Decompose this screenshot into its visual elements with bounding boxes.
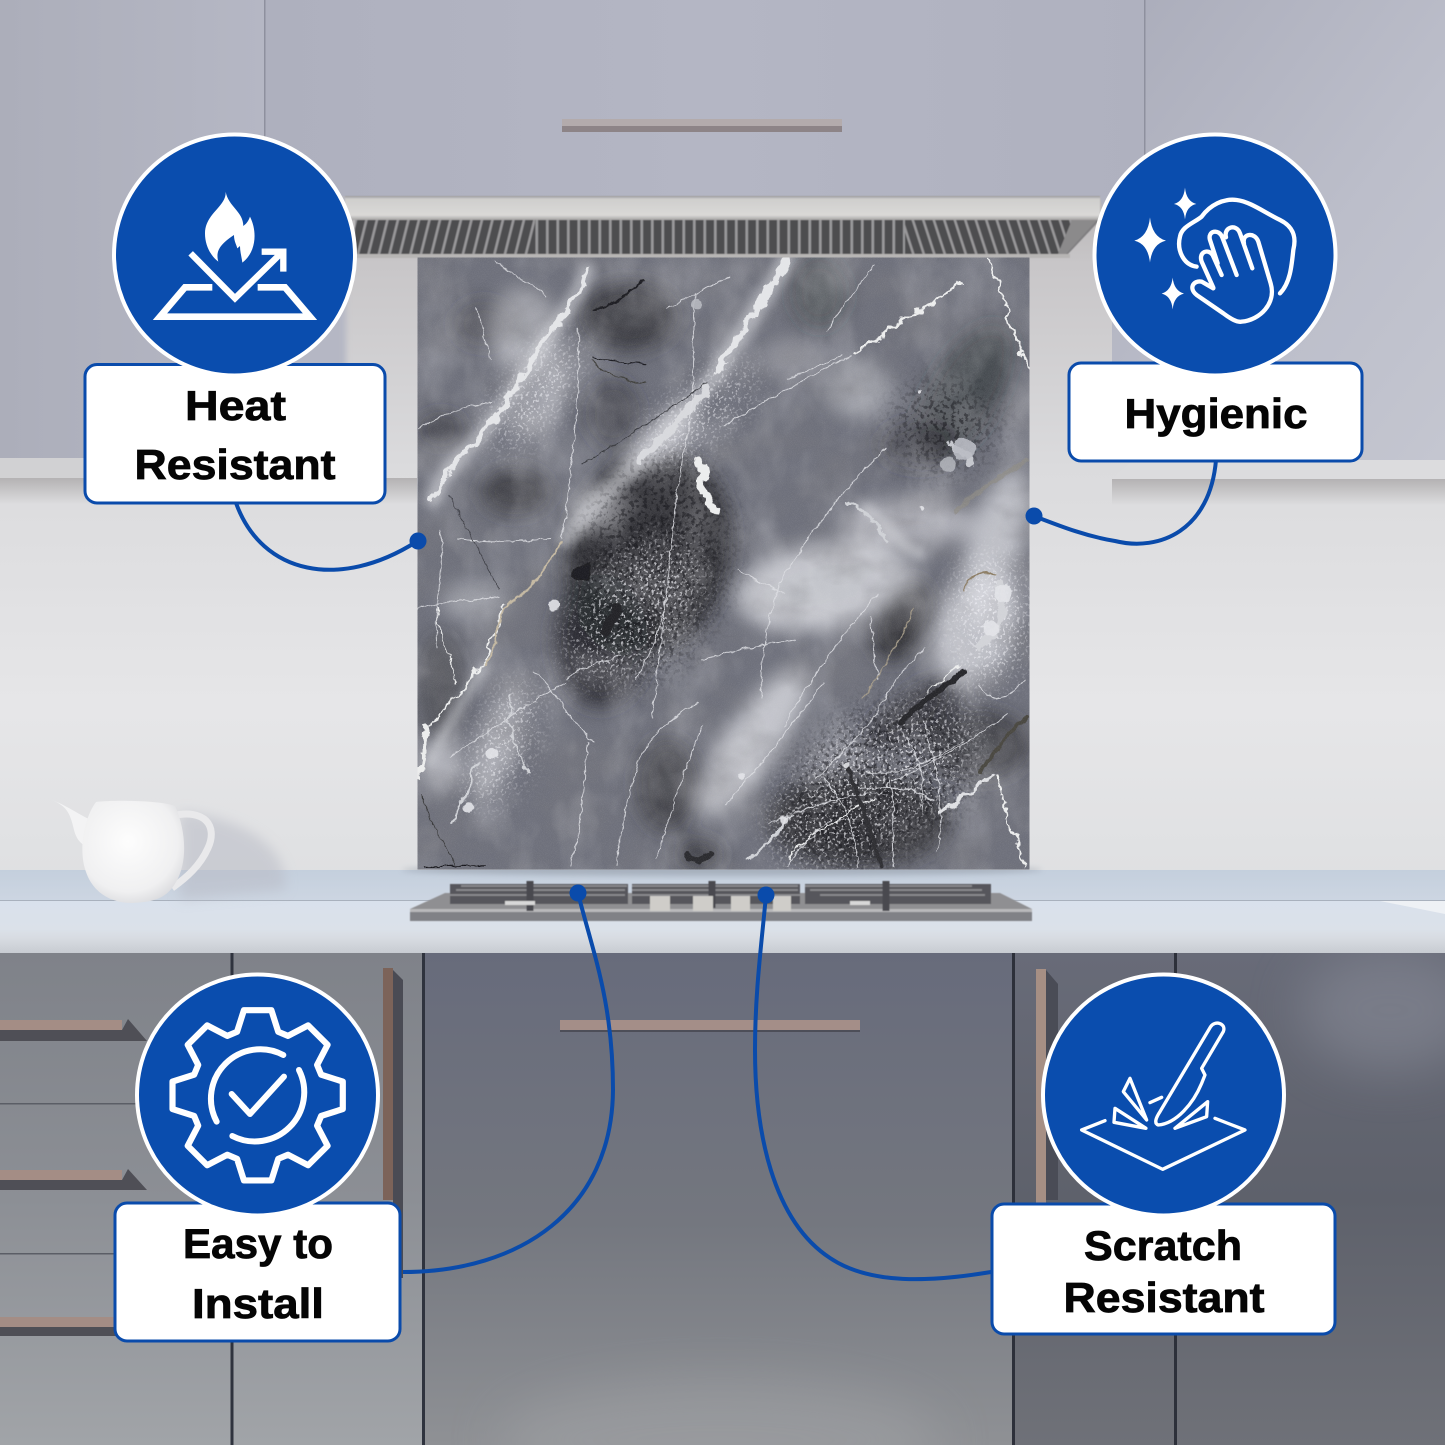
badge circle: scratch resistant: [1043, 974, 1284, 1216]
upper left cabinet: [0, 0, 264, 458]
label box: heat resistant: [85, 364, 385, 503]
upper handle: [562, 119, 842, 132]
connector: scratch resistant: [755, 886, 991, 1279]
heading: easy to: Easy to: [183, 1220, 333, 1267]
pale texture clouds: [418, 258, 1029, 869]
icon: gear with check: [173, 1010, 343, 1180]
marble gold veins: [486, 460, 1026, 699]
marble thick white veins: [418, 259, 1029, 866]
feature: hygienic: [1069, 134, 1362, 461]
shadow below left cabinet: [0, 478, 417, 504]
wall: [0, 196, 1445, 876]
icon: hand wiping with sparkles: [1134, 188, 1295, 322]
base cabinets: [0, 950, 1445, 1445]
feature: easy to install: [115, 974, 400, 1341]
marble grain: [418, 258, 1029, 869]
feature: scratch resistant: [992, 974, 1335, 1334]
badge circle: heat resistant: [114, 134, 355, 376]
heading: heat resistant: Heat: [185, 382, 286, 429]
heading: install: Install: [192, 1280, 324, 1327]
marble splashback panel: [418, 258, 1042, 900]
cabinet handles: [0, 968, 1058, 1336]
countertop: [0, 864, 1445, 953]
upper middle cabinet: [265, 0, 1145, 196]
cabinet seam: [264, 0, 266, 196]
teapot: [52, 800, 285, 903]
dark marble clouds: [418, 258, 1033, 870]
shadow below right cabinet: [1112, 479, 1445, 505]
label box: easy to install: [115, 1203, 400, 1341]
connector: hygienic: [1026, 460, 1216, 544]
gas hob: [410, 881, 1032, 921]
heading: hygienic: Hygienic: [1124, 390, 1308, 437]
icon: knife on surface: [1082, 1023, 1245, 1169]
marble speckles: [464, 299, 1012, 823]
upper right cabinet: [1100, 0, 1445, 460]
heading: heat resistant line two: Resistant: [134, 441, 336, 488]
heading: resistant: Resistant: [1064, 1274, 1265, 1321]
dark speckled zones: [559, 386, 1002, 899]
badge circle: easy to install: [137, 974, 378, 1216]
marble black cracks: [421, 281, 1026, 866]
connector: easy to install: [403, 884, 613, 1272]
feature: heat resistant: [85, 134, 385, 503]
range hood: [345, 196, 1100, 258]
label box: scratch resistant: [992, 1204, 1335, 1334]
white speckled zones: [459, 326, 1026, 900]
upper left cabinet lower section: [262, 196, 346, 458]
label box: hygienic: [1069, 363, 1362, 461]
left cabinet underside: [0, 458, 84, 478]
badge circle: hygienic: [1094, 134, 1336, 376]
marble texture clouds: [418, 258, 1029, 869]
white vein halos: [429, 259, 921, 765]
cabinet seam right: [1144, 0, 1146, 196]
icon: flame over surface: [160, 192, 310, 317]
right cabinet underside: [1112, 460, 1445, 479]
heading: scratch: Scratch: [1084, 1222, 1242, 1269]
marble fine veins: [418, 261, 1026, 866]
connector: heat resistant: [236, 503, 426, 570]
light marble clouds: [421, 289, 1042, 831]
